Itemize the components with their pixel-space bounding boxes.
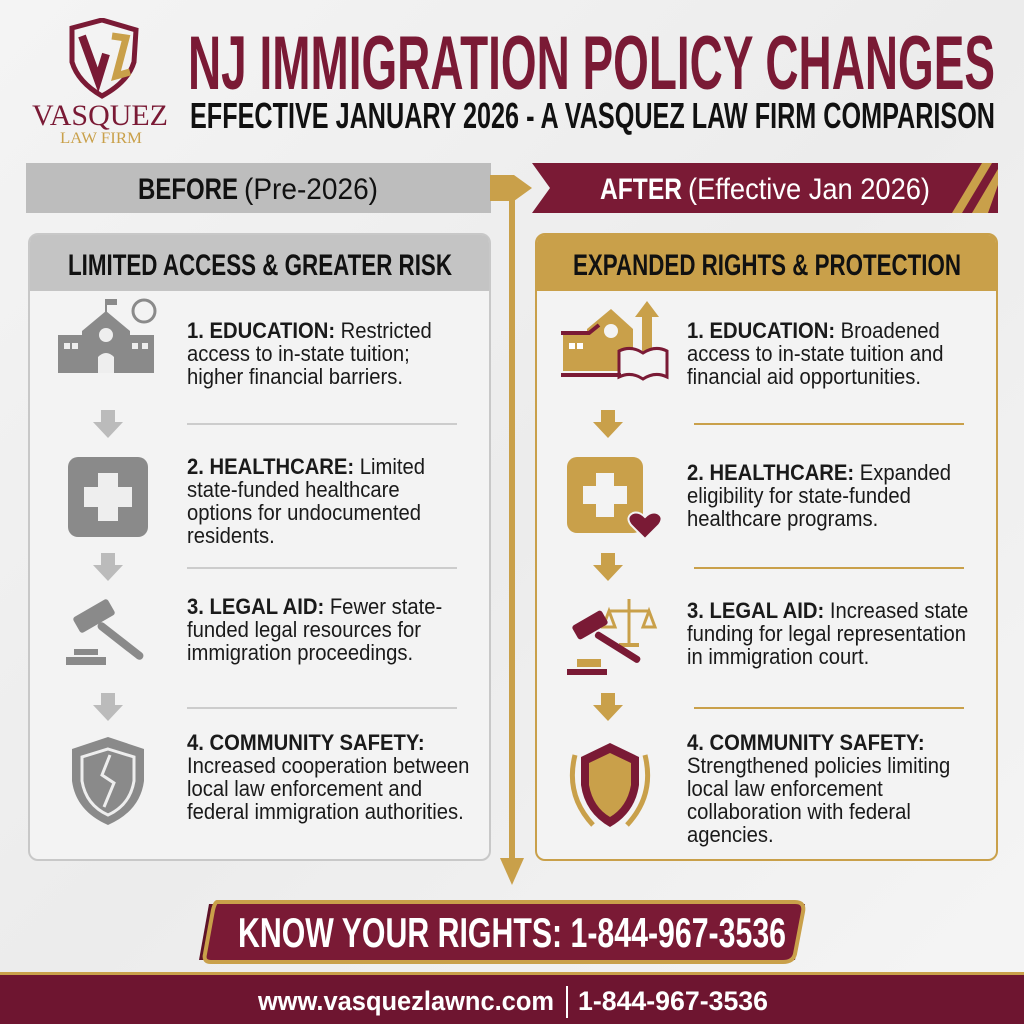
item 2 before: [187, 454, 425, 548]
icon: school: [58, 298, 156, 373]
item 1 after: access to in-state tuition and: [687, 341, 944, 366]
item 4 after: local law enforcement: [687, 776, 883, 801]
item 4 after: Strengthened policies limiting: [687, 753, 950, 778]
arrow: down gray: [93, 410, 123, 438]
item 3 after: in immigration court.: [687, 644, 869, 669]
item 3 after: [687, 598, 968, 669]
icon: healthcare: [68, 457, 148, 537]
banner: after: AFTER: [600, 173, 682, 206]
icon: healthcare heart: [567, 457, 661, 538]
item 2 before: state-funded healthcare: [187, 477, 400, 502]
banner: after: [532, 163, 998, 213]
panel header: after: [537, 235, 996, 291]
footer: [0, 972, 1024, 1024]
item 1 before: [187, 318, 432, 389]
arrow: down gray: [93, 553, 123, 581]
item 1 after: [687, 318, 944, 389]
item 2 before: options for undocumented: [187, 500, 421, 525]
item 3 after: funding for legal representation: [687, 621, 966, 646]
icon: gavel: [66, 599, 144, 665]
item 3 before: funded legal resources for: [187, 617, 421, 642]
banner: before: (Pre-2026): [244, 173, 378, 206]
panel: after: [535, 233, 998, 861]
icon: school gold: [561, 301, 668, 381]
item 2 before: residents.: [187, 523, 275, 548]
item 2 after: 2. HEALTHCARE: Expanded: [687, 460, 951, 485]
item 4 after: collaboration with federal: [687, 799, 911, 824]
arrow: down gray: [93, 693, 123, 721]
logo: LAW FIRM: [60, 130, 142, 147]
logo: [32, 18, 168, 147]
item 3 before: 3. LEGAL AID: Fewer state-: [187, 594, 442, 619]
panel header: before: [30, 235, 489, 291]
banner: before: [26, 163, 491, 213]
item 4 after: 4. COMMUNITY SAFETY:: [687, 730, 925, 755]
item 2 after: [687, 460, 951, 531]
item 4 after: agencies.: [687, 822, 774, 847]
arrow: down gold: [593, 410, 623, 438]
item 1 before: access to in-state tuition;: [187, 341, 410, 366]
arrow: down gold: [593, 553, 623, 581]
item 1 after: 1. EDUCATION: Broadened: [687, 318, 940, 343]
item 1 before: 1. EDUCATION: Restricted: [187, 318, 432, 343]
icon: shield broken: [72, 737, 144, 825]
item 4 before: Increased cooperation between: [187, 753, 469, 778]
panel: before: [28, 233, 491, 861]
item 3 before: immigration proceedings.: [187, 640, 413, 665]
arrow: down gold: [593, 693, 623, 721]
item 3 after: 3. LEGAL AID: Increased state: [687, 598, 968, 623]
item 2 after: eligibility for state-funded: [687, 483, 911, 508]
banner: before: BEFORE: [138, 173, 238, 206]
item 4 before: local law enforcement and: [187, 776, 422, 801]
item 2 after: healthcare programs.: [687, 506, 878, 531]
CTA button: [199, 900, 806, 964]
item 2 before: 2. HEALTHCARE: Limited: [187, 454, 425, 479]
footer: www.vasquezlawnc.com: [257, 986, 554, 1016]
icon: gavel and scales: [567, 599, 658, 675]
banner: after: (Effective Jan 2026): [688, 173, 930, 206]
icon: shield laurel: [570, 743, 650, 827]
footer: 1-844-967-3536: [578, 986, 768, 1016]
arrow: gold connector: [490, 175, 532, 885]
item 4 before: [187, 730, 469, 824]
item 4 after: [687, 730, 950, 847]
item 1 after: financial aid opportunities.: [687, 364, 921, 389]
item 3 before: [187, 594, 442, 665]
logo: VASQUEZ: [32, 99, 168, 132]
item 4 before: 4. COMMUNITY SAFETY:: [187, 730, 425, 755]
item 4 before: federal immigration authorities.: [187, 799, 464, 824]
item 1 before: higher financial barriers.: [187, 364, 403, 389]
